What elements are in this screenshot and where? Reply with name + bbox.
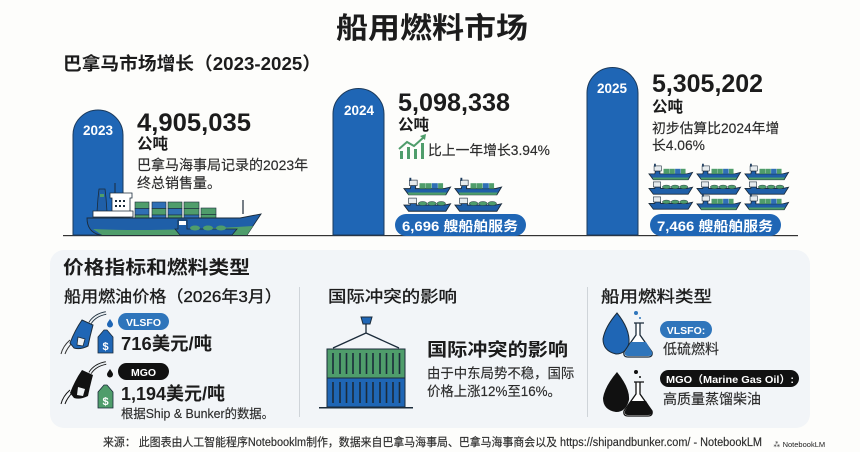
source note: 根据Ship & Bunker的数据。	[121, 406, 274, 421]
title: 船用燃料市场	[336, 12, 528, 45]
heading: Panama market growth: 巴拿马市场增长（2023-2025）	[63, 53, 321, 74]
label: MGO	[660, 370, 799, 387]
subheading: 船用燃油价格（2026年3月）	[64, 288, 282, 306]
label: VLSFO: VLSFO	[126, 317, 161, 329]
description: 长4.06%	[652, 138, 705, 153]
panel: price indicators and fuel types	[50, 250, 810, 428]
label: MGO	[118, 363, 169, 380]
MGO price: 1,194美元/吨	[121, 383, 225, 404]
icon: ships	[404, 178, 502, 211]
panel: 2023	[73, 109, 308, 235]
VLSFO price: 716美元/吨	[121, 333, 212, 354]
value: 2024 tonnage: 5,098,338	[398, 89, 510, 117]
bar: 2024: 2024	[344, 103, 375, 118]
label: MGO: MGO	[131, 367, 156, 379]
pill: ships served	[395, 214, 526, 236]
column: bunker prices	[61, 288, 282, 421]
conflict heading: 国际冲突的影响	[427, 339, 568, 360]
description: 初步估算比2024年增	[652, 120, 779, 136]
subheading: 国际冲突的影响	[328, 288, 457, 306]
subheading: 船用燃料类型	[601, 288, 712, 306]
pill: ships served: 7,466 艘船舶服务	[657, 218, 774, 234]
label: VLSFO	[660, 321, 712, 338]
bar: 2025	[587, 68, 638, 235]
bar: 2024	[333, 88, 384, 235]
icon: blue drop and flask	[603, 311, 652, 357]
divider	[299, 287, 300, 417]
value: 2025 tonnage: 5,305,202	[652, 70, 763, 98]
description: 比上一年增长3.94%	[428, 143, 550, 158]
source footer: 来源： 此图表由人工智能程序Notebooklm制作，数据来自巴拿马海事局、巴拿马海事商会以及 https://shipandbunker.com/ - NotebookLM	[103, 435, 762, 449]
panel: 2025	[587, 68, 788, 236]
icon: blue price tag	[98, 330, 113, 353]
VLSFO description: 低硫燃料	[663, 341, 719, 357]
description: 终总销售量。	[137, 175, 221, 191]
column: fuel types	[601, 288, 799, 416]
panel: 2024	[333, 88, 550, 236]
label: VLSFO: VLSFO:	[667, 325, 705, 337]
bar: 2023: 2023	[83, 123, 114, 138]
bar: 2023	[73, 110, 123, 235]
icon: lifted containers	[319, 317, 413, 408]
MGO description: 高质量蒸馏柴油	[663, 391, 761, 407]
icon: ships	[649, 164, 788, 210]
icon: green price tag: $	[102, 396, 109, 408]
icon: black drop and flask	[603, 370, 652, 416]
value: 2023 tonnage: 4,905,035	[137, 109, 251, 137]
baseline	[63, 235, 798, 236]
icon: blue price tag: $	[102, 341, 109, 353]
unit: 公吨	[398, 116, 430, 134]
pill: ships served	[650, 214, 781, 236]
heading: price indicators: 价格指标和燃料类型	[63, 257, 250, 278]
icon: blue fuel nozzle	[61, 313, 113, 354]
pill: ships served: 6,696 艘船舶服务	[402, 218, 519, 234]
unit: 公吨	[652, 98, 684, 116]
unit: 公吨	[137, 135, 169, 153]
watermark: ⁂ NotebookLM	[773, 440, 825, 449]
bar: 2025: 2025	[597, 81, 628, 96]
icon: green price tag	[98, 385, 113, 408]
label: MGO: MGO（Marine Gas Oil）:	[666, 373, 794, 386]
icon: container ship	[87, 183, 261, 235]
icon: black fuel nozzle	[61, 363, 113, 404]
divider	[587, 287, 588, 417]
description: 巴拿马海事局记录的2023年	[137, 157, 308, 173]
conflict description: 由于中东局势不稳，国际	[427, 366, 574, 381]
column: conflict impact	[319, 288, 574, 408]
label: VLSFO	[118, 313, 169, 330]
conflict description: 价格上涨12%至16%。	[427, 384, 561, 399]
icon: growth chart	[399, 134, 426, 159]
